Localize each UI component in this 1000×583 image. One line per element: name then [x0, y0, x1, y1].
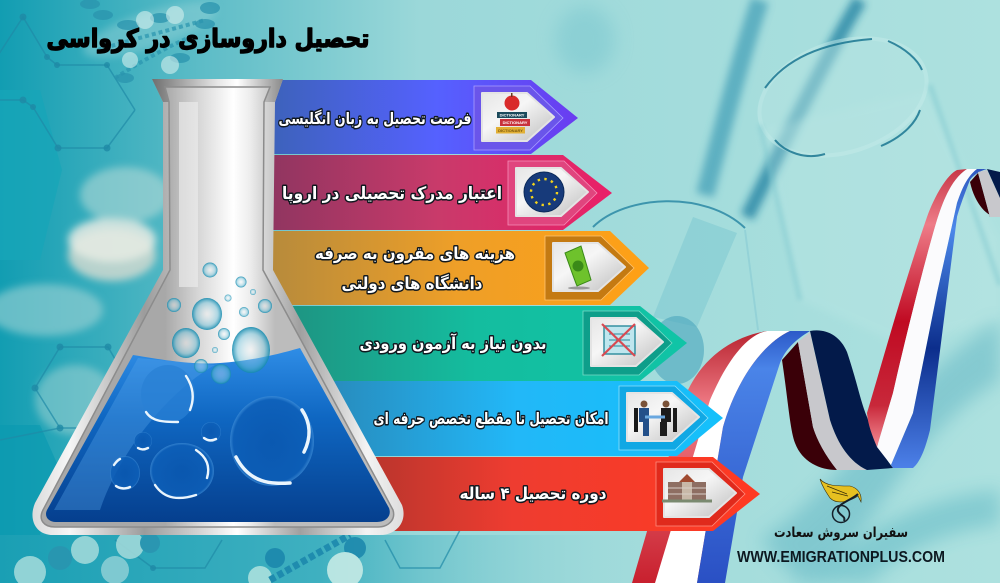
neck lip [152, 79, 283, 102]
text: امکان تحصیل تا مقطع تخصص حرفه ای [374, 409, 608, 428]
text: دوره تحصیل ۴ ساله [459, 484, 606, 504]
test tubes [555, 0, 1000, 583]
glass outer rim [32, 79, 404, 535]
neck highlight [179, 102, 198, 287]
arrow 4: no entrance exam [265, 306, 687, 381]
title: تحصیل داروسازی در کرواسی [46, 24, 370, 54]
icon card with dictionaries: DICTIONARY [500, 112, 525, 118]
flask [32, 79, 404, 535]
icon card with dictionaries [474, 86, 563, 150]
text: بدون نیاز به آزمون ورودی [360, 332, 546, 354]
arrow 3: low cost [265, 231, 649, 305]
text: فرصت تحصیل به زبان انگلیسی [278, 109, 472, 128]
icon card with dictionaries: DICTIONARY [503, 120, 528, 125]
icon card with EU flag [508, 161, 597, 225]
icon card with meeting [619, 386, 708, 450]
arrow 2: European recognition [265, 155, 612, 230]
text: هزینه های مقرون به صرفه [315, 244, 515, 264]
bubbles [110, 262, 314, 499]
icon card with crossed form [583, 311, 672, 375]
website: WWW.EMIGRATIONPLUS.COM [737, 549, 945, 566]
brand name: سفیران سروش سعادت [774, 525, 908, 541]
text: اعتبار مدرک تحصیلی در اروپا [282, 184, 502, 204]
molecule strands [78, 0, 222, 83]
icon: winged emblem [820, 479, 861, 522]
arrow 5: professional doctorate [265, 381, 723, 456]
glass body [41, 87, 394, 527]
text [315, 244, 515, 294]
arrow 6: four year course [265, 457, 760, 531]
icon card with dictionaries: DICTIONARY [498, 128, 523, 133]
logo [737, 479, 945, 566]
hexagon lines [0, 17, 460, 568]
pills [0, 167, 170, 435]
ribbon: Croatian flag colours [632, 169, 1000, 583]
arrow 1: English programme [265, 80, 578, 154]
text: دانشگاه های دولتی [342, 273, 482, 294]
icon card with university [656, 462, 745, 526]
icon card with banknote [545, 236, 634, 300]
liquid [46, 348, 390, 522]
